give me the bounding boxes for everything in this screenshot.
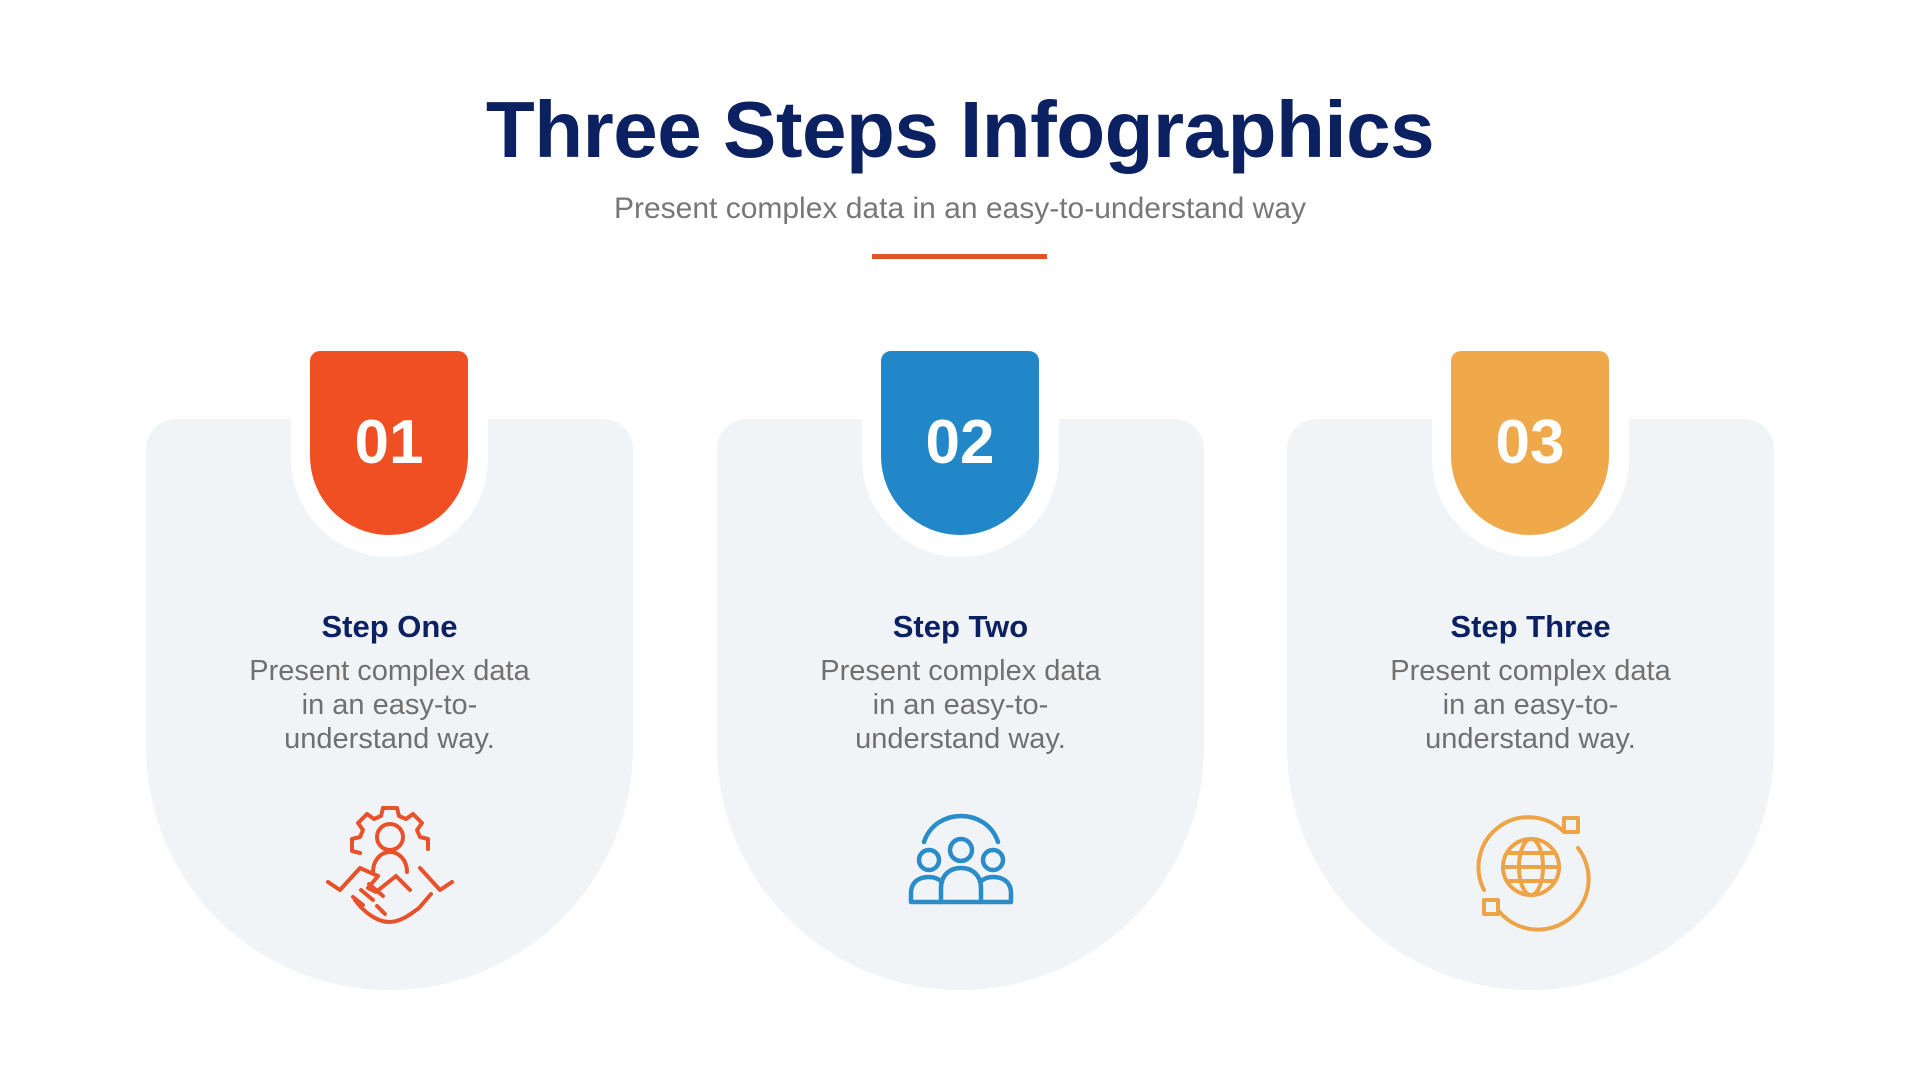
icon: handshake gear — [326, 806, 454, 924]
panel: step two — [717, 351, 1204, 990]
title: Three Steps Infographics — [486, 85, 1434, 174]
subtitle: Present complex data in an easy-to-understand way — [614, 192, 1306, 225]
text: step three — [1390, 655, 1671, 755]
icon: globe — [1476, 815, 1591, 932]
badge 01: 01 — [355, 408, 423, 477]
panel: step three — [1287, 351, 1774, 990]
accent line — [872, 254, 1047, 259]
badge 03: 03 — [1496, 408, 1564, 477]
heading: step three: Step Three — [1450, 609, 1611, 644]
text: step two: understand way. — [855, 723, 1066, 755]
text: step three: in an easy-to- — [1443, 689, 1618, 721]
text: step two: in an easy-to- — [873, 689, 1048, 721]
text: step one: understand way. — [284, 723, 495, 755]
text: step three: Present complex data — [1390, 655, 1671, 687]
icon: people group — [908, 814, 1014, 904]
text: step one — [249, 655, 530, 755]
text: step three: understand way. — [1425, 723, 1636, 755]
text: step one: in an easy-to- — [302, 689, 477, 721]
panel: step one — [146, 351, 633, 990]
heading: step one: Step One — [321, 609, 458, 644]
heading: step two: Step Two — [893, 609, 1028, 644]
text: step two: Present complex data — [820, 655, 1101, 687]
badge 03 — [1451, 351, 1609, 535]
text: step two — [820, 655, 1101, 755]
badge 02 — [881, 351, 1039, 535]
text: step one: Present complex data — [249, 655, 530, 687]
badge 01 — [310, 351, 468, 535]
badge 02: 02 — [926, 408, 994, 477]
